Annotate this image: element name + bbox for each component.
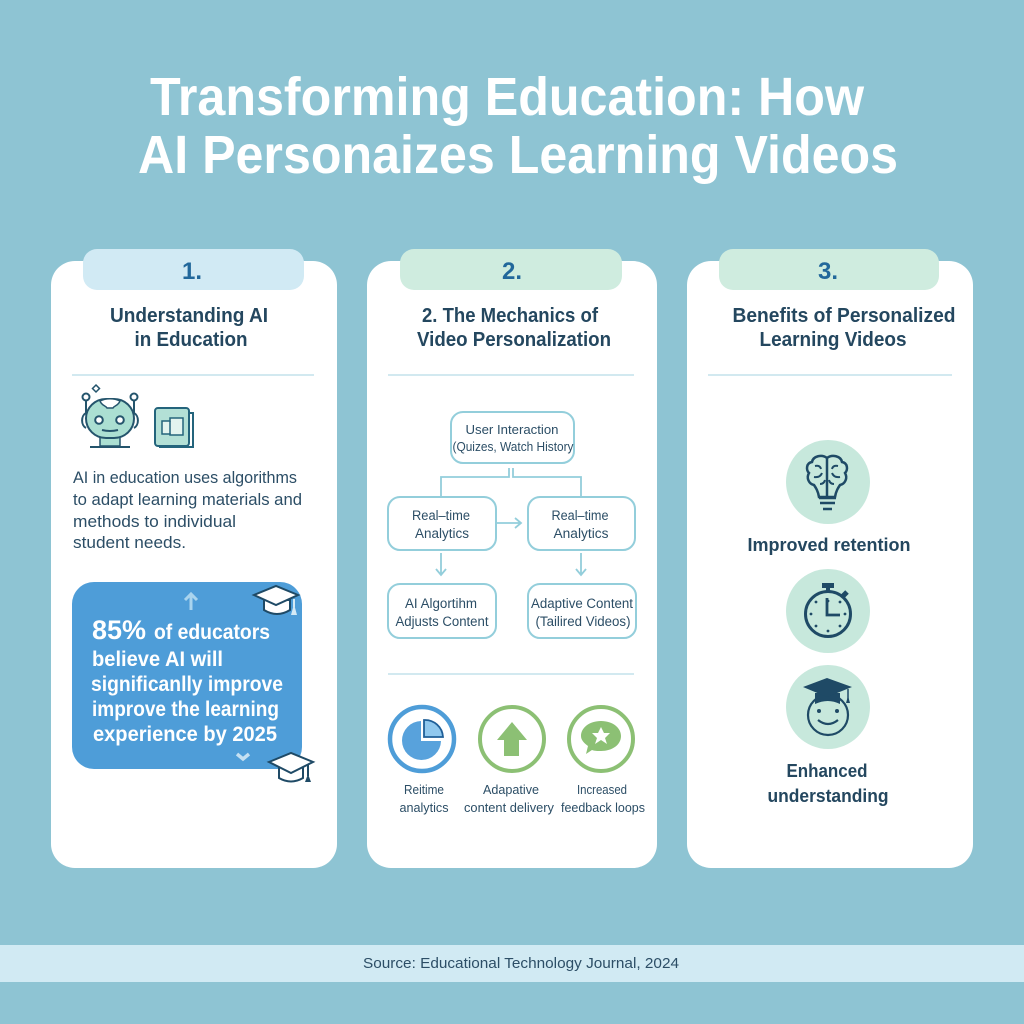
callout text: of educators — [154, 621, 270, 644]
icon: up arrow — [185, 594, 197, 610]
icon: smiling graduate — [786, 665, 870, 749]
panel: understanding AI in education — [51, 249, 337, 868]
callout text — [91, 615, 283, 746]
icon: speech bubble with star — [569, 707, 633, 771]
node: real-time analytics left: Real–time — [412, 508, 470, 523]
callout text: significanlly improve — [91, 673, 283, 696]
text block: AI definition: to adapt learning materials and — [73, 490, 302, 509]
callout text: 85% — [92, 615, 146, 645]
source footer: Source: Educational Technology Journal, 2024 — [363, 955, 679, 972]
metric: adaptive content delivery — [464, 707, 555, 815]
heading: understanding AI in education: Understanding AI — [110, 305, 268, 327]
icon: brain lightbulb — [786, 440, 870, 524]
callout text: experience by 2025 — [93, 723, 277, 746]
node: adaptive content: (Tailired Videos) — [536, 614, 630, 629]
node: real-time analytics left: Analytics — [415, 526, 469, 541]
title: Transforming Education: How — [150, 67, 865, 127]
node: adaptive content: Adaptive Content — [531, 596, 633, 611]
heading: mechanics of video personalization — [417, 305, 611, 351]
icon: stopwatch — [786, 569, 870, 653]
badge: number 2: 2. — [502, 258, 522, 285]
node: AI algorithm — [388, 584, 496, 638]
source footer — [0, 945, 1024, 982]
text block: AI definition — [73, 468, 302, 552]
heading: mechanics of video personalization: 2. The Mechanics of — [422, 305, 598, 327]
callout text: improve the learning — [92, 698, 279, 721]
badge: number 3: 3. — [818, 258, 838, 285]
badge: number 1 — [83, 249, 304, 290]
icon: up arrow — [480, 707, 544, 771]
badge: number 1: 1. — [182, 258, 202, 285]
node: adaptive content — [528, 584, 636, 638]
label: improved retention: Improved retention — [748, 535, 910, 555]
label: enhanced understanding — [768, 761, 888, 806]
badge: number 2 — [400, 249, 622, 290]
heading: understanding AI in education — [110, 305, 268, 351]
icon: graduation cap top — [254, 586, 298, 615]
metric: realtime analytics: Reitime — [404, 783, 444, 797]
metric: increased feedback loops: Increased — [577, 783, 627, 797]
heading: understanding AI in education: in Education — [134, 329, 248, 351]
heading: benefits of personalized learning videos — [732, 305, 956, 351]
heading: benefits of personalized learning videos: Learning Videos — [760, 329, 906, 351]
node: AI algorithm: AI Algortihm — [405, 596, 477, 611]
title — [138, 67, 898, 185]
icon: book — [155, 408, 193, 447]
title: AI Personaizes Learning Videos — [138, 125, 898, 185]
label: enhanced understanding: Enhanced — [786, 761, 868, 781]
heading: mechanics of video personalization: Video Personalization — [417, 329, 611, 351]
label: enhanced understanding: understanding — [768, 786, 888, 806]
icon: pie chart — [390, 707, 454, 771]
text block: AI definition: AI in education uses algorithms — [73, 468, 297, 487]
icon: down chevron — [237, 754, 249, 759]
node: user interaction: (Quizes, Watch History — [452, 439, 574, 454]
node: AI algorithm: Adjusts Content — [396, 614, 489, 629]
text block: AI definition: methods to individual — [73, 512, 236, 531]
flowchart — [388, 412, 636, 638]
icon: graduation cap bottom — [269, 753, 313, 782]
node: real-time analytics right: Analytics — [554, 526, 609, 541]
callout: 85% of educators — [72, 582, 313, 782]
node: real-time analytics left — [388, 497, 496, 550]
badge: number 3 — [719, 249, 939, 290]
connectors and arrows — [436, 468, 586, 575]
node: real-time analytics right — [528, 497, 635, 550]
panel: mechanics of video personalization — [367, 249, 657, 868]
heading: benefits of personalized learning videos: Benefits of Personalized — [732, 305, 956, 327]
metric: realtime analytics — [390, 707, 454, 815]
metric: adaptive content delivery: content delivery — [464, 801, 555, 815]
panel: benefits of personalized learning videos — [687, 249, 973, 868]
metric: realtime analytics: analytics — [400, 801, 448, 815]
text block: AI definition: student needs. — [73, 533, 186, 552]
icon: robot — [82, 385, 138, 447]
node: user interaction — [451, 412, 574, 463]
metric: adaptive content delivery: Adapative — [483, 783, 539, 797]
node: user interaction: User Interaction — [466, 422, 558, 437]
metric: increased feedback loops — [561, 707, 645, 815]
callout text: believe AI will — [92, 648, 223, 671]
metric: increased feedback loops: feedback loops — [561, 801, 645, 815]
node: real-time analytics right: Real–time — [552, 508, 608, 523]
